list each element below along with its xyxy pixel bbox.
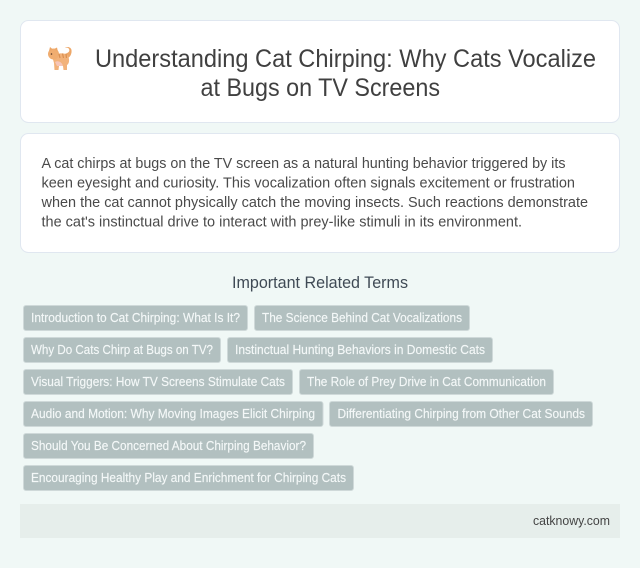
description text: when the cat cannot physically catch the moving insects. Such reactions demonstrate — [41, 194, 588, 211]
tag 9: Should You Be Concerned About Chirping Behavior? — [31, 438, 306, 453]
panel: title card — [20, 20, 620, 122]
description text — [41, 155, 588, 230]
tag 8 — [330, 402, 592, 426]
panel: description card — [20, 134, 620, 252]
title text: at Bugs on TV Screens — [200, 74, 440, 102]
tag 2 — [254, 306, 470, 330]
tag 4: Instinctual Hunting Behaviors in Domestic Cats — [235, 342, 485, 357]
tag 3 — [24, 338, 220, 362]
footer text: catknowy.com — [533, 513, 610, 528]
tag 5 — [24, 370, 292, 394]
panel: related term tags — [24, 306, 592, 490]
tag 1: Introduction to Cat Chirping: What Is It? — [31, 310, 240, 325]
title text — [95, 45, 596, 102]
tag 4 — [228, 338, 492, 362]
tag 9 — [24, 434, 314, 458]
description text: keen eyesight and curiosity. This vocalization often signals excitement or frustration — [42, 174, 575, 192]
icon: cat — [48, 47, 72, 70]
footer bar — [20, 504, 620, 538]
tag 2: The Science Behind Cat Vocalizations — [262, 310, 462, 325]
tag 7 — [24, 402, 323, 426]
tag 5: Visual Triggers: How TV Screens Stimulate Cats — [31, 374, 285, 389]
tag 3: Why Do Cats Chirp at Bugs on TV? — [31, 342, 213, 357]
description text: the cat's instinctual drive to interact with prey-like stimuli in its environment. — [42, 214, 522, 230]
title text: Understanding Cat Chirping: Why Cats Vocalize — [95, 45, 596, 73]
tag 6 — [300, 370, 554, 394]
tag 1 — [24, 306, 248, 330]
heading: related terms: Important Related Terms — [232, 274, 408, 292]
tag 10: Encouraging Healthy Play and Enrichment for Chirping Cats — [31, 470, 346, 485]
tag 7: Audio and Motion: Why Moving Images Elicit Chirping — [31, 406, 315, 421]
tag 6: The Role of Prey Drive in Cat Communication — [307, 374, 546, 389]
description text: A cat chirps at bugs on the TV screen as a natural hunting behavior triggered by its — [42, 155, 566, 172]
tag 8: Differentiating Chirping from Other Cat Sounds — [338, 406, 585, 421]
tag 10 — [24, 466, 354, 490]
